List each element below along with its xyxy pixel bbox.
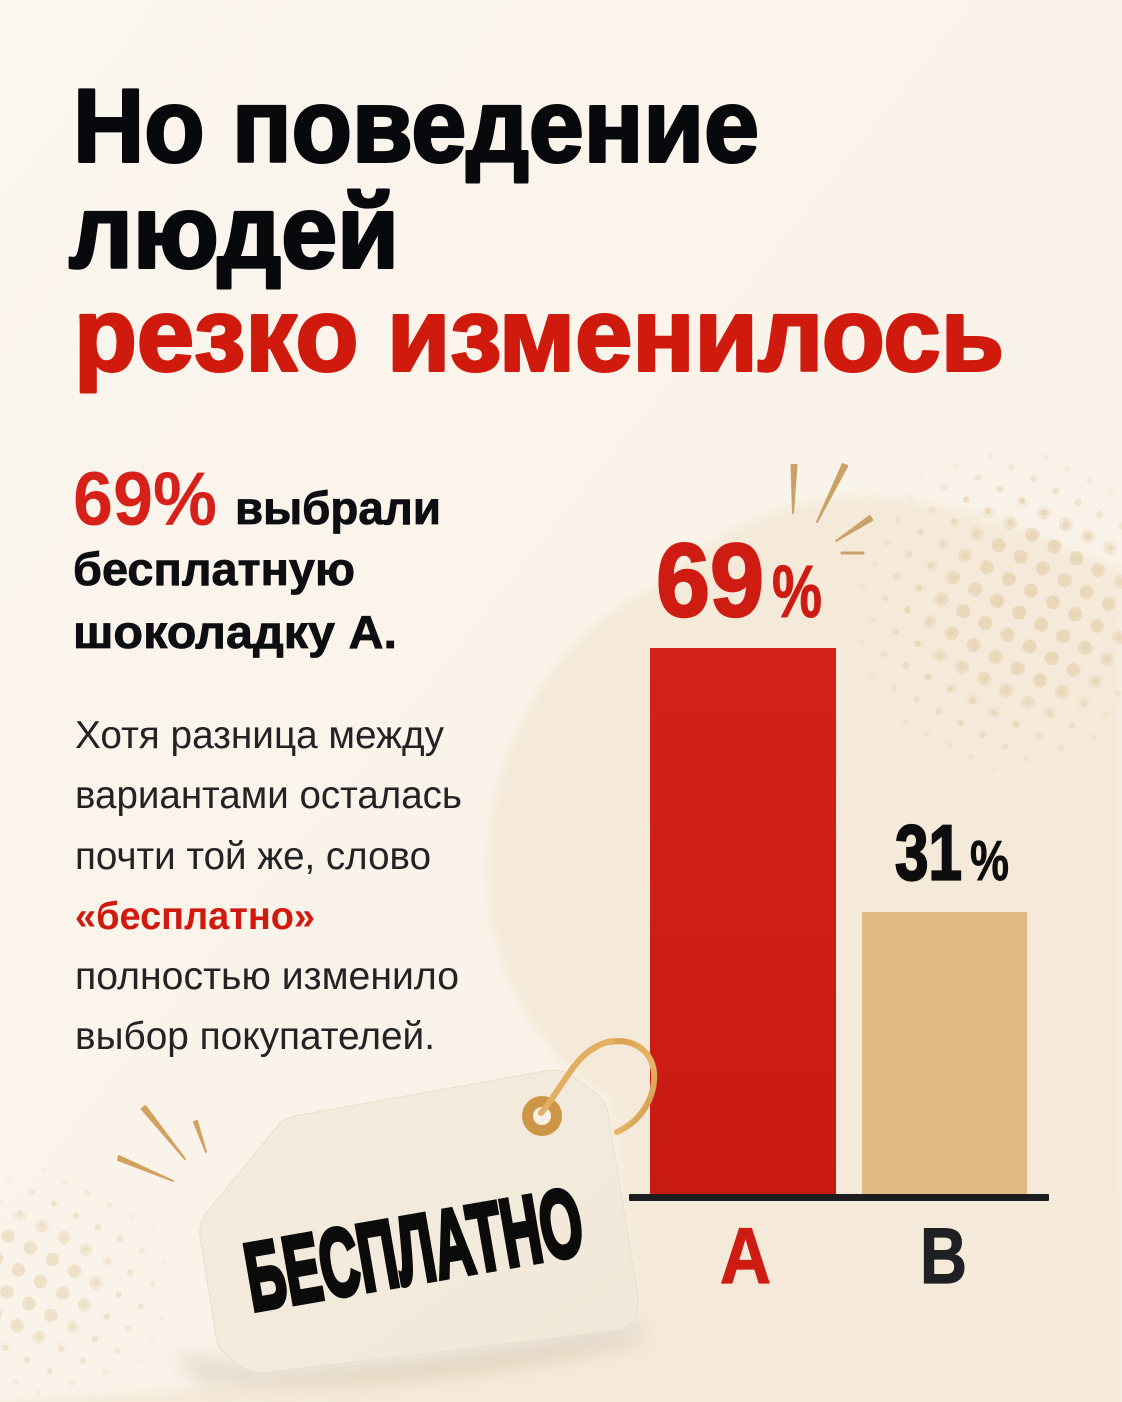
- title: [69, 68, 1004, 394]
- string front part: [541, 1041, 612, 1113]
- body text: [75, 714, 462, 1058]
- value label 69%: 69: [656, 523, 764, 639]
- title: Но поведение: [73, 68, 759, 184]
- axis: [629, 1194, 1049, 1201]
- category label A: A: [720, 1211, 771, 1300]
- subheading: 69% chose free chocolate A: шоколадку А.: [73, 606, 397, 658]
- tag text: БЕСПЛАТНО: [237, 1168, 591, 1332]
- value label 69%: %: [772, 550, 822, 633]
- body text: полностью изменило: [75, 955, 459, 998]
- bar B: [862, 912, 1027, 1194]
- body text: вариантами осталась: [75, 774, 462, 817]
- sparkle rays near tag: [118, 1106, 206, 1181]
- tag shadow: [170, 1318, 646, 1385]
- value label 31%: %: [970, 829, 1009, 893]
- title: резко изменилось: [74, 278, 1004, 394]
- body text: Хотя разница между: [75, 714, 444, 757]
- price tag: [170, 1041, 654, 1385]
- subheading: 69% chose free chocolate A: [73, 457, 441, 658]
- tag body: [200, 1070, 638, 1373]
- sparkle rays above 69%: [792, 464, 872, 553]
- category label B: B: [920, 1211, 967, 1300]
- bar A: [650, 648, 836, 1195]
- subheading: 69% chose free chocolate A: бесплатную: [73, 543, 355, 595]
- subheading: 69% chose free chocolate A: выбрали: [235, 482, 441, 534]
- title: людей: [69, 174, 399, 290]
- halftone dots: lower left: [0, 1172, 164, 1396]
- eyelet: [528, 1102, 556, 1130]
- value label 69%: [656, 523, 822, 639]
- halftone dots: upper right: [862, 452, 1122, 767]
- value label 31%: 31: [895, 808, 962, 896]
- body text: «бесплатно»: [75, 895, 315, 938]
- bar chart: [629, 523, 1049, 1300]
- body text: почти той же, слово: [75, 835, 431, 878]
- string back part: [610, 1041, 654, 1132]
- body text: выбор покупателей.: [75, 1015, 435, 1058]
- subheading: 69% chose free chocolate A: 69%: [73, 457, 217, 542]
